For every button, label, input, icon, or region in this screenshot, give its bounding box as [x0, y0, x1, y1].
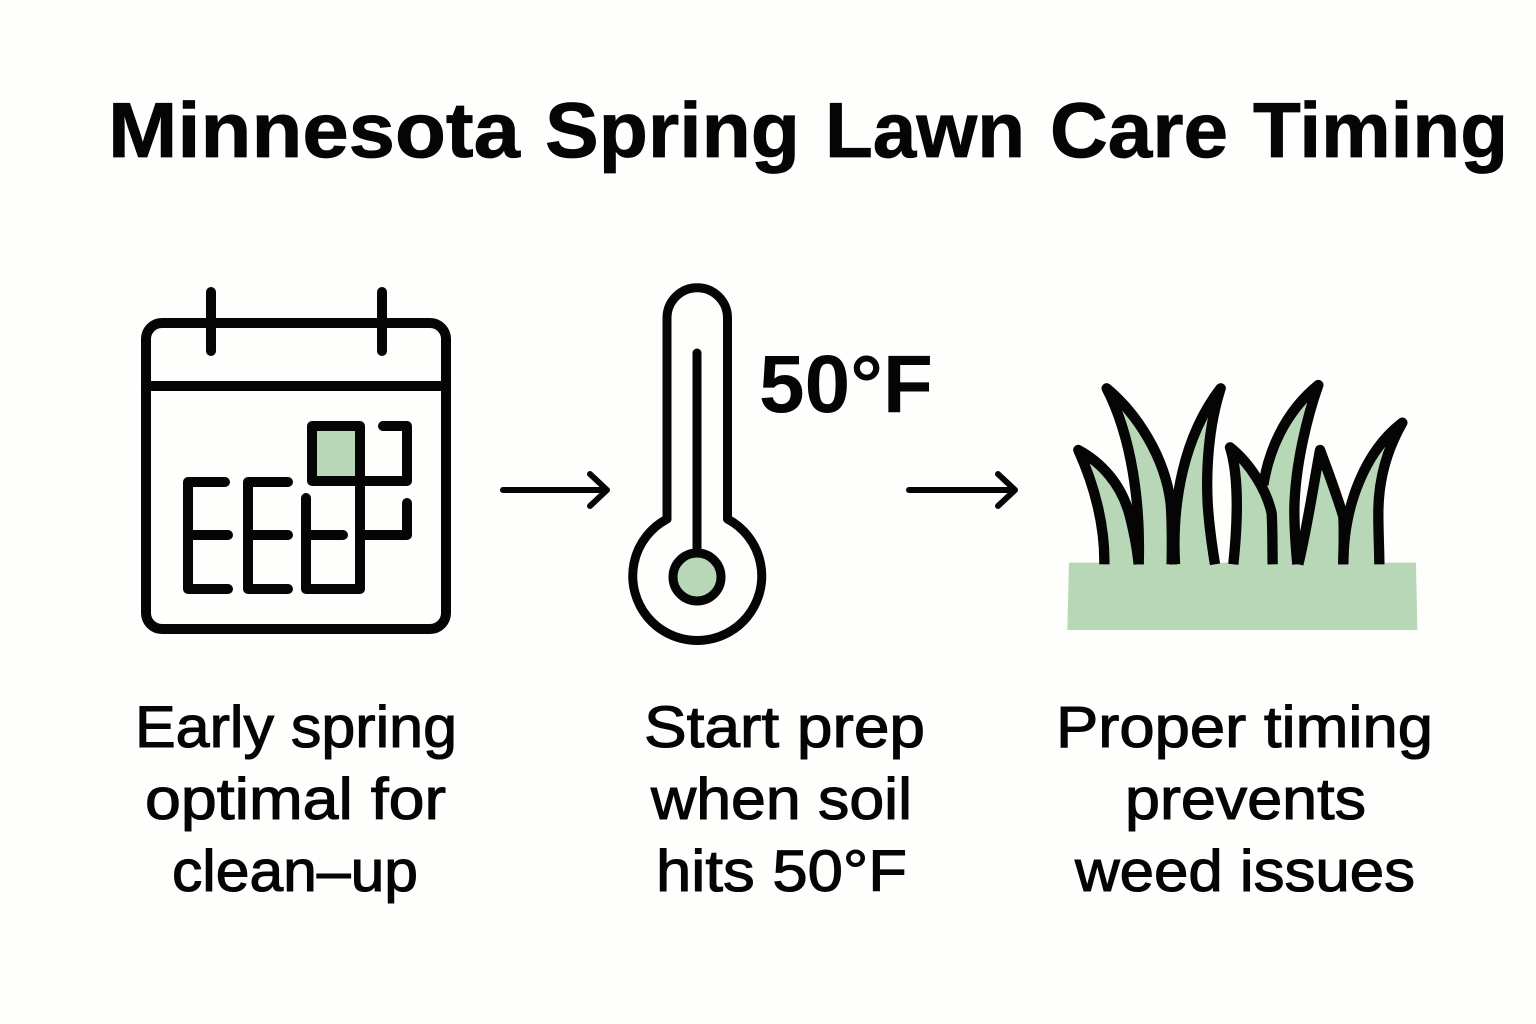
- caption: start prep: Start prep: [644, 695, 925, 760]
- caption: proper timing: prevents: [1125, 767, 1366, 832]
- caption: early spring: clean–up: [172, 839, 418, 904]
- icon: grass: [1067, 385, 1417, 630]
- arrow: calendar to thermometer: [503, 474, 607, 506]
- title: Minnesota: [108, 86, 521, 174]
- caption: proper timing: weed issues: [1074, 839, 1415, 904]
- 50°F label: 50°F: [759, 339, 933, 430]
- caption: proper timing: [1056, 695, 1433, 904]
- icon: calendar: [146, 292, 446, 629]
- caption: early spring: Early spring: [135, 695, 457, 760]
- title: [108, 86, 1508, 174]
- caption: early spring: optimal for: [145, 767, 446, 832]
- title: Lawn: [825, 86, 1025, 174]
- icon: thermometer: [633, 288, 762, 640]
- caption: start prep: [644, 695, 925, 904]
- title: Timing: [1253, 86, 1508, 174]
- title: Care: [1050, 86, 1228, 174]
- title: Spring: [545, 86, 800, 174]
- caption: start prep: when soil: [650, 767, 912, 832]
- caption: early spring: [135, 695, 457, 904]
- arrow: thermometer to grass: [909, 474, 1015, 506]
- caption: start prep: hits 50°F: [656, 839, 907, 904]
- caption: proper timing: Proper timing: [1056, 695, 1433, 760]
